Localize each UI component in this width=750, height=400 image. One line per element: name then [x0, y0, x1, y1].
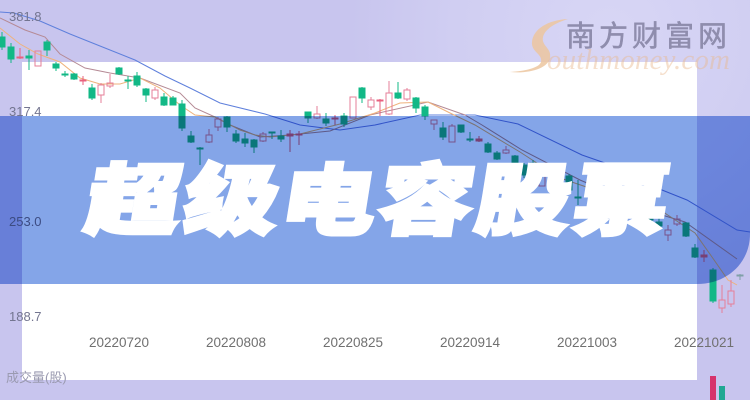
- watermark domain: outhmoney.com: [547, 44, 730, 76]
- volume bars: [710, 376, 725, 400]
- x axis date labels: 20220720: [89, 335, 149, 350]
- small grey candle: [737, 274, 743, 280]
- y axis labels: 381.8: [9, 9, 42, 24]
- x axis date labels: 20221003: [557, 335, 617, 350]
- white chart panel: [22, 62, 697, 380]
- x axis date labels: 20220825: [323, 335, 383, 350]
- title: 超级电容股票: [79, 139, 682, 250]
- y axis labels: [9, 9, 42, 324]
- green candles: [0, 32, 716, 303]
- watermark Chinese name: 南方财富网: [566, 13, 727, 55]
- x axis date labels: [89, 335, 734, 350]
- blue title band: [0, 116, 750, 284]
- x axis date labels: 20220808: [206, 335, 266, 350]
- y axis labels: 253.0: [9, 214, 42, 229]
- x axis date labels: 20220914: [440, 335, 501, 350]
- y axis labels: 188.7: [9, 309, 42, 324]
- watermark logo: [510, 13, 730, 76]
- candlestick chart: [0, 12, 750, 313]
- red solid candles: [17, 48, 707, 262]
- moving average lines: [0, 12, 750, 285]
- x axis date labels: 20221021: [674, 335, 734, 350]
- volume axis label: 成交量(股): [6, 370, 67, 385]
- logo swoosh: [510, 19, 568, 72]
- y axis labels: 317.4: [9, 104, 42, 119]
- red hollow candles: [35, 51, 734, 313]
